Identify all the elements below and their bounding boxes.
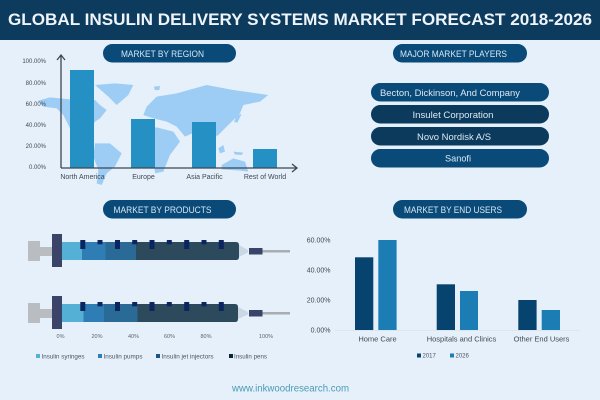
x axis labels: 20% xyxy=(91,334,103,340)
website url: www.inkwoodresearch.com xyxy=(231,384,349,394)
category labels: Asia Pacific xyxy=(186,174,223,181)
legend: products: Insulin pumps xyxy=(104,354,142,360)
y axis labels: 60.00% xyxy=(307,238,330,244)
legend: products: Insulin jet injectors xyxy=(162,354,214,360)
list: market players: Insulet Corporation xyxy=(412,110,494,121)
heading: major market players xyxy=(393,44,527,62)
x axis labels: 80% xyxy=(200,334,212,340)
heading: market by products xyxy=(103,200,236,218)
category labels xyxy=(60,174,286,181)
x axis labels: 100% xyxy=(259,334,273,340)
legend: years xyxy=(417,354,470,360)
y axis labels xyxy=(22,59,47,171)
list: market players: Novo Nordisk A/S xyxy=(417,132,491,143)
x axis labels xyxy=(57,334,273,340)
category labels: Rest of World xyxy=(244,174,286,181)
syringe 1 xyxy=(28,234,290,267)
y axis labels: 80.00% xyxy=(26,81,47,87)
world map backdrop xyxy=(38,83,268,185)
list: market players xyxy=(371,83,549,168)
chart: market by region xyxy=(22,55,297,185)
legend: products xyxy=(36,354,267,360)
bars 2017 xyxy=(355,257,537,330)
legend: products: Insulin syringes xyxy=(42,354,84,360)
category labels: Other End Users xyxy=(514,334,570,344)
y axis labels: 20.00% xyxy=(307,298,330,304)
list: market players: Sanofi xyxy=(445,154,471,164)
bars xyxy=(70,70,277,168)
heading: market by end users: MARKET BY END USERS xyxy=(404,205,502,215)
legend: years: 2017 xyxy=(422,354,437,360)
chart: market by end users xyxy=(307,238,580,360)
title banner: GLOBAL INSULIN DELIVERY SYSTEMS MARKET FORECAST 2018-2026 xyxy=(8,10,592,29)
heading: market by region xyxy=(103,44,236,62)
bars 2026 xyxy=(378,240,560,330)
title banner xyxy=(0,0,600,40)
y axis labels: 60.00% xyxy=(26,102,47,108)
list: market players: Becton, Dickinson, And Company xyxy=(380,88,520,99)
chart: syringe bars xyxy=(28,234,290,360)
y axis labels: 40.00% xyxy=(307,268,330,274)
category labels: Home Care xyxy=(358,334,397,344)
syringe 2 xyxy=(28,296,290,329)
x axis labels: 40% xyxy=(128,334,139,340)
category labels: North America xyxy=(60,174,105,181)
y axis labels: 40.00% xyxy=(26,123,47,129)
x axis labels: 0% xyxy=(57,334,65,340)
category labels xyxy=(358,334,570,344)
heading: market by products: MARKET BY PRODUCTS xyxy=(114,205,212,215)
heading: market by end users xyxy=(393,200,527,218)
x axis labels: 60% xyxy=(164,334,175,340)
y axis labels: 20.00% xyxy=(26,144,47,150)
y axis labels: 0.00% xyxy=(29,165,47,171)
y axis labels: 100.00% xyxy=(22,59,47,65)
legend: products: Insulin pens xyxy=(234,354,267,360)
category labels: Hospitals and Clinics xyxy=(427,334,497,344)
axes xyxy=(57,55,297,172)
heading: market by region: MARKET BY REGION xyxy=(121,49,204,59)
y axis labels: 0.00% xyxy=(311,328,330,334)
legend: years: 2026 xyxy=(456,354,470,360)
category labels: Europe xyxy=(132,174,155,181)
heading: major market players: MAJOR MARKET PLAYERS xyxy=(400,49,507,59)
y axis labels xyxy=(307,238,330,334)
